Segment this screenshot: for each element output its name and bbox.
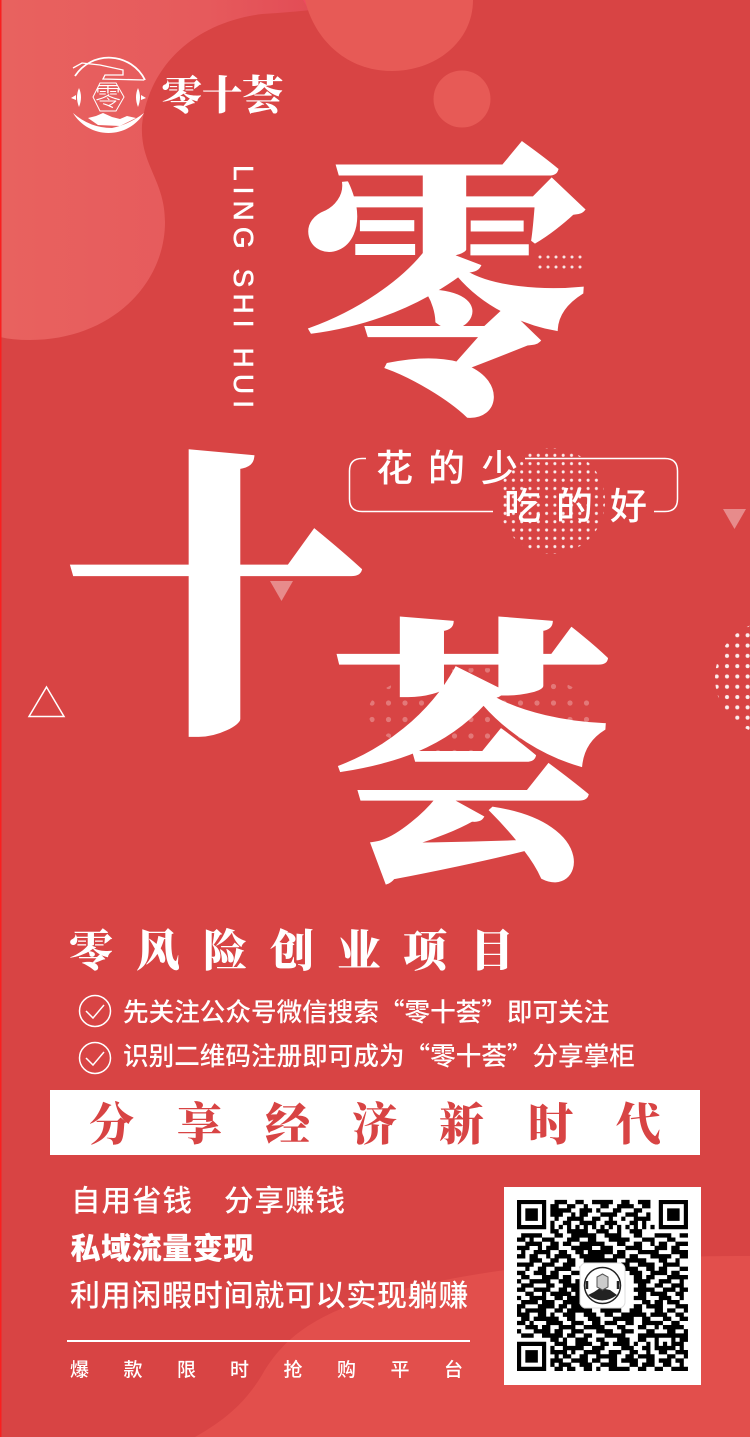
item 1 [80, 992, 609, 1029]
big character: 十: 十 [64, 438, 368, 775]
tagline [350, 448, 678, 527]
item text: 识别二维码注册即可成为“零十荟”分享掌柜 [123, 1036, 635, 1073]
tagline text: 花的少: 花的少 [376, 448, 518, 489]
dot pattern: faint behind 荟 [368, 668, 592, 756]
QR modules [517, 1200, 688, 1371]
slogan: 爆款限时抢购平台 [70, 1359, 463, 1381]
banner text: 分享经济新时代 [89, 1099, 662, 1150]
icon: logo emblem [71, 58, 146, 133]
banner [50, 1090, 700, 1155]
big character: 荟: 荟 [334, 610, 610, 916]
icon: logo emblem: 零 [95, 77, 121, 114]
vertical text: LING SHI HUI: LING SHI HUI [228, 165, 259, 408]
benefits [70, 1185, 469, 1313]
checklist [80, 992, 635, 1074]
item text: 先关注公众号微信搜索“零十荟”即可关注 [123, 992, 609, 1029]
QR finder: top right [659, 1200, 688, 1229]
background blob: top pink [303, 0, 375, 15]
benefit line 3: 利用闲暇时间就可以实现躺赚 [70, 1280, 469, 1313]
banner background [50, 1090, 700, 1155]
dot pattern: right edge [715, 621, 750, 735]
dot pattern: tagline circle [499, 448, 605, 554]
benefit line 2: 私域流量变现 [70, 1232, 254, 1266]
item 2 [80, 1036, 635, 1074]
QR background [504, 1187, 701, 1385]
big character: 零: 零 [302, 134, 589, 452]
divider [67, 1340, 470, 1342]
triangle: center [270, 581, 293, 601]
QR finder: bottom left [517, 1342, 546, 1371]
logo [71, 58, 283, 133]
QR code [504, 1187, 701, 1385]
background blob: top left [0, 0, 375, 340]
QR finder: top left [517, 1200, 546, 1229]
icon: check [80, 996, 110, 1026]
triangle: left outline [29, 687, 64, 716]
tagline frame [350, 458, 678, 512]
benefit line 1: 自用省钱分享赚钱 [71, 1185, 345, 1218]
dot pattern: near 零 [536, 252, 584, 272]
left edge line [0, 0, 2, 1437]
background circle: small [434, 70, 490, 128]
triangle: right [723, 509, 746, 529]
logo wordmark: 零十荟 [162, 74, 283, 118]
background wave: bottom [195, 1256, 750, 1437]
background circle: top [305, 0, 473, 71]
QR center logo [580, 1263, 625, 1308]
heading: 零风险创业项目: 零风险创业项目 [69, 927, 514, 976]
tagline text: 吃的好: 吃的好 [504, 486, 647, 527]
icon: check [80, 1042, 110, 1074]
